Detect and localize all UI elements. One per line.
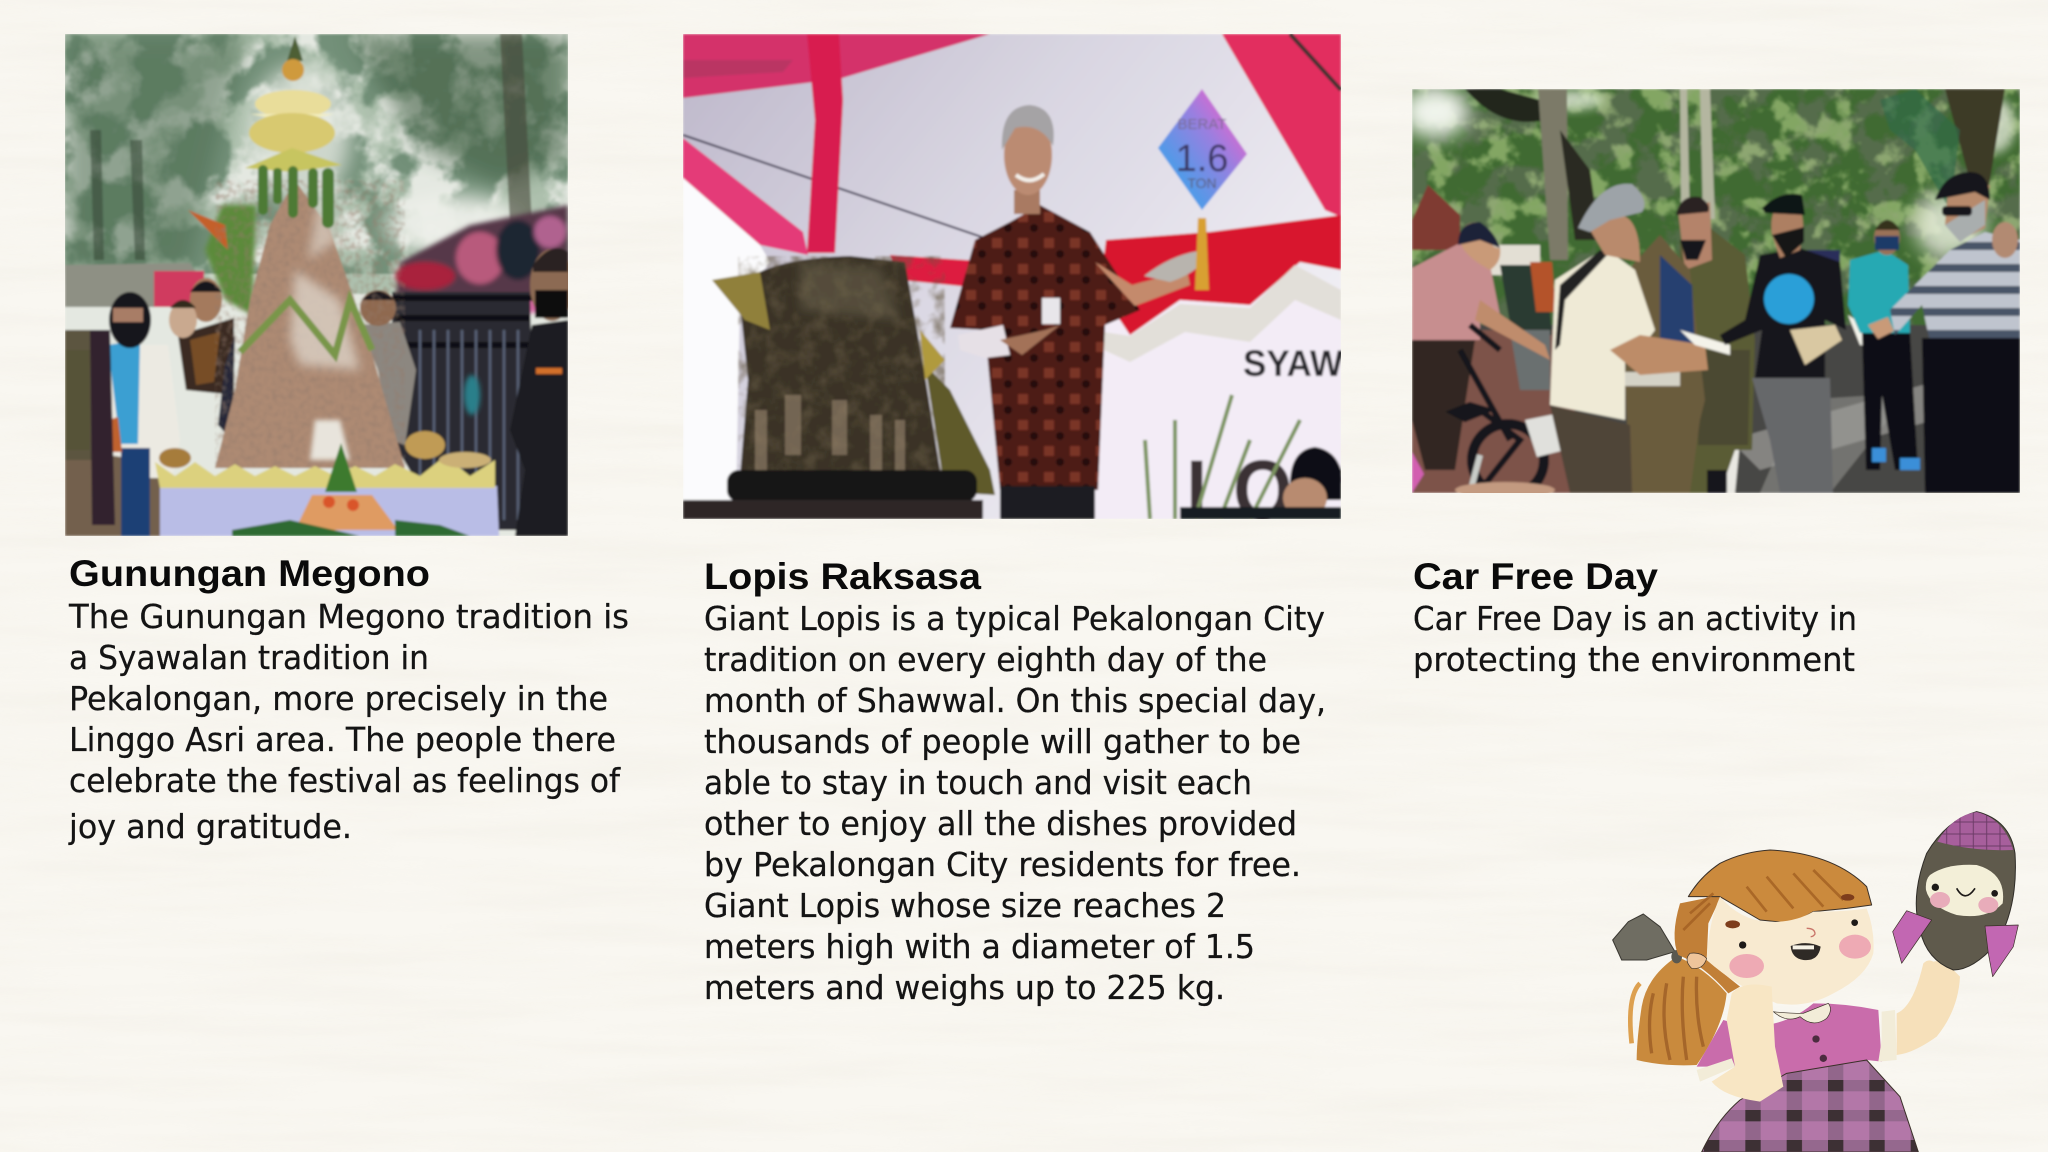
body text xyxy=(68,597,629,846)
woman in cardigan xyxy=(93,292,180,536)
face xyxy=(1707,897,1874,1005)
weight kite: 1.6 xyxy=(1176,138,1228,180)
heading: Car Free Day xyxy=(1413,556,1658,597)
body text: meters high with a diameter of 1.5 xyxy=(704,927,1255,966)
body text: joy and gratitude. xyxy=(68,807,352,846)
body text: other to enjoy all the dishes provided xyxy=(704,804,1297,843)
caption: Gunungan Megono xyxy=(68,553,629,846)
man in black at right edge xyxy=(510,248,574,536)
papers xyxy=(1680,315,1895,355)
giant lopis xyxy=(683,256,995,519)
plate xyxy=(1144,250,1207,282)
collar and cuffs xyxy=(1697,1003,1897,1082)
hair strands xyxy=(1683,870,1843,930)
photo: Gunungan Megono tumpeng xyxy=(65,34,568,536)
heading: Gunungan Megono xyxy=(69,553,430,594)
body text: Pekalongan, more precisely in the xyxy=(69,679,608,718)
body text xyxy=(1413,599,1857,679)
body text: tradition on every eighth day of the xyxy=(704,640,1267,679)
tent pink panels xyxy=(683,34,1341,500)
toy rocket xyxy=(1893,812,2018,977)
white wall banner xyxy=(1090,290,1341,519)
photo: Car Free Day xyxy=(1412,89,2020,493)
small tumpeng xyxy=(232,443,470,536)
side hair xyxy=(1675,895,1740,993)
crown of the cone xyxy=(245,36,342,228)
body text: by Pekalongan City residents for free. xyxy=(704,845,1301,884)
man in teal shirt xyxy=(1848,220,1920,470)
tent, banner and ground xyxy=(65,263,218,536)
man in pink polo xyxy=(1412,222,1550,470)
dress torso xyxy=(1697,1003,1882,1077)
background walkers xyxy=(1500,250,1840,390)
banner lettering xyxy=(1186,343,1344,537)
body text: able to stay in touch and visit each xyxy=(704,763,1252,802)
body text: a Syawalan tradition in xyxy=(69,638,429,677)
man in white tee xyxy=(1550,184,1708,493)
grass xyxy=(1145,395,1300,519)
ponytail and bow xyxy=(1613,914,1727,1065)
crowd on the right xyxy=(395,205,568,314)
body text: Giant Lopis whose size reaches 2 xyxy=(704,886,1226,925)
caption: Car Free Day xyxy=(1413,556,1857,679)
body text: celebrate the festival as feelings of xyxy=(69,761,621,800)
illustration: girl holding toy rocket xyxy=(1613,812,2018,1152)
folding bicycle xyxy=(1412,325,1577,498)
body text: Linggo Asri area. The people there xyxy=(69,720,616,759)
man in black tee xyxy=(1720,194,1846,493)
man in batik shirt xyxy=(950,105,1190,519)
people behind xyxy=(65,278,416,525)
body text: meters and weighs up to 225 kg. xyxy=(704,968,1225,1007)
body text: The Gunungan Megono tradition is xyxy=(68,597,629,636)
seated man in black cap xyxy=(1180,447,1341,519)
hair xyxy=(1688,850,1872,923)
weight kite: BERAT xyxy=(1178,116,1226,133)
caption: Lopis Raksasa xyxy=(704,556,1326,1007)
weight kite xyxy=(1158,89,1247,290)
uniformed officer front xyxy=(1625,235,1705,493)
body text: Car Free Day is an activity in xyxy=(1413,599,1857,638)
trees and sky xyxy=(1401,86,2020,329)
body text: thousands of people will gather to be xyxy=(704,722,1301,761)
raised arm xyxy=(1897,960,1960,1055)
ear xyxy=(1687,953,1707,969)
iron fence xyxy=(392,292,535,530)
tree canopy xyxy=(65,34,568,294)
rice cone xyxy=(215,180,405,468)
road and pavement xyxy=(1412,325,2020,493)
skirt plaid xyxy=(1702,1060,1918,1152)
blush, eyes, mouth xyxy=(1725,894,1871,978)
heading: Lopis Raksasa xyxy=(704,556,981,597)
body text: protecting the environment xyxy=(1413,640,1855,679)
weight kite: TON xyxy=(1187,175,1217,191)
official in striped polo xyxy=(1868,172,2020,493)
lavender table with trim xyxy=(155,431,499,536)
uniformed officer rear xyxy=(1676,197,1755,493)
arm at cheek xyxy=(1712,984,1783,1102)
plant spray xyxy=(188,205,256,315)
body text xyxy=(704,599,1326,1007)
body text: Giant Lopis is a typical Pekalongan City xyxy=(704,599,1325,638)
body text: month of Shawwal. On this special day, xyxy=(704,681,1326,720)
photo: Lopis Raksasa xyxy=(683,34,1344,537)
